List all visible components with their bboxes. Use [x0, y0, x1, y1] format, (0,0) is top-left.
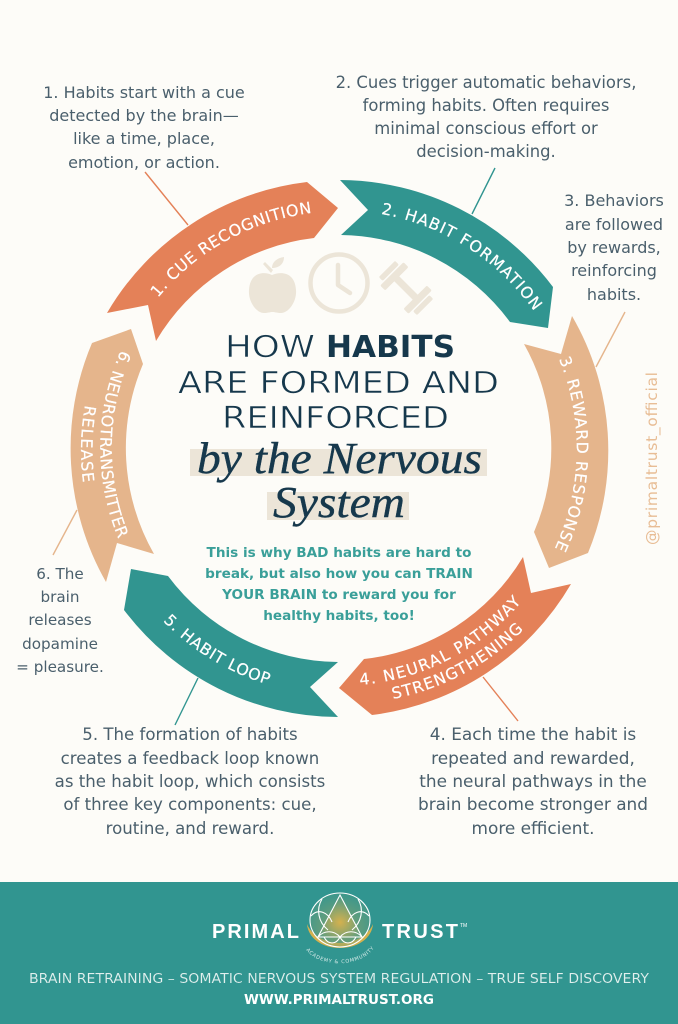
arrow: 1. cue recognition [107, 182, 338, 341]
arrow: 6. neurotransmitter release: RELEASE [80, 406, 96, 482]
logo: primal trust wordmark and emblem [212, 892, 467, 964]
text: step 2 description [336, 73, 636, 161]
connector line: step 4 [483, 677, 518, 721]
connector line: step 3 [596, 312, 625, 367]
text: step 4 description: 4. Each time the habit is [430, 724, 636, 744]
arrow: 4. neural pathway strengthening [339, 557, 571, 715]
arrow: 5. habit loop: 5. HABIT LOOP [164, 614, 270, 683]
arrow: 2. habit formation [340, 180, 553, 328]
website: WWW.PRIMALTRUST.ORG [244, 992, 434, 1008]
title: HOW [225, 330, 315, 365]
icon: dumbbell [375, 257, 437, 319]
arrow: 1. cue recognition: 1. CUE RECOGNITION [150, 202, 310, 297]
footer band [0, 882, 678, 1024]
title: ARE FORMED AND [178, 366, 499, 401]
text: step 1 description: like a time, place, [73, 129, 215, 148]
title: HABITS [326, 330, 455, 365]
vertical handle: @primaltrust_official [643, 372, 662, 545]
title: by the Nervous [197, 434, 482, 483]
tagline: BRAIN RETRAINING – SOMATIC NERVOUS SYSTEM REGULATION – TRUE SELF DISCOVERY [29, 971, 650, 987]
logo: primal trust wordmark and emblem: ACADEMY & COMMUNITY [306, 946, 374, 964]
text: step 4 description [418, 724, 648, 838]
connector line: step 2 [472, 168, 495, 214]
text: step 1 description: emotion, or action. [68, 153, 220, 172]
text: step 3 description: 3. Behaviors [564, 191, 664, 210]
text: step 3 description: habits. [587, 285, 641, 304]
text: step 2 description: decision-making. [416, 142, 556, 161]
connector line: step 6 [53, 510, 77, 555]
text: step 4 description: repeated and rewarded, [431, 748, 635, 768]
logo: primal trust wordmark and emblem: TRUST [382, 921, 458, 943]
title [178, 330, 499, 527]
arrow: 6. neurotransmitter release: 6. NEUROTRANSMITTER [100, 352, 130, 538]
highlight [267, 492, 409, 520]
text: step 3 description: reinforcing [571, 261, 657, 280]
text: step 6 description [16, 565, 104, 676]
text: step 5 description: 5. The formation of habits [82, 725, 298, 744]
arrow: 2. habit formation: 2. HABIT FORMATION [382, 203, 543, 310]
text: step 4 description: more efficient. [472, 818, 594, 838]
text: step 1 description [43, 83, 245, 172]
subtitle text: This is why BAD habits are hard to [207, 545, 471, 561]
arrow: 5. habit loop [124, 569, 338, 717]
text: step 6 description: 6. The [36, 565, 84, 583]
connector line: step 5 [175, 678, 198, 725]
icon: apple [249, 257, 296, 313]
text: step 5 description: of three key components: cue, [63, 795, 317, 814]
text: step 6 description: = pleasure. [16, 658, 104, 676]
logo: primal trust wordmark and emblem: TM [460, 923, 467, 929]
arrow: 6. neurotransmitter release [70, 329, 154, 582]
subtitle text: healthy habits, too! [263, 608, 415, 624]
text: step 3 description: by rewards, [567, 238, 661, 257]
text: step 1 description: detected by the brain— [49, 106, 239, 125]
arrow: 3. reward response [524, 316, 608, 568]
text: step 3 description: are followed [565, 215, 663, 234]
subtitle text: break, but also how you can TRAIN [205, 566, 473, 582]
text: step 5 description: as the habit loop, which consists [55, 772, 325, 791]
text: step 2 description: minimal conscious effort or [374, 119, 598, 138]
text: step 4 description: brain become stronger and [418, 794, 648, 814]
arrow: 4. neural pathway strengthening: STRENGTHENING [392, 622, 522, 698]
title: System [273, 478, 405, 527]
text: step 6 description: brain [40, 588, 80, 606]
arrow: 3. reward response: 3. REWARD RESPONSE [555, 356, 588, 552]
icon: clock [310, 254, 368, 312]
title: REINFORCED [222, 401, 449, 436]
logo: primal trust wordmark and emblem: PRIMAL [212, 921, 299, 943]
text: step 5 description: routine, and reward. [106, 819, 274, 838]
connector line: step 1 [145, 172, 188, 225]
text: step 6 description: dopamine [22, 635, 98, 653]
text: step 4 description: the neural pathways in the [419, 771, 647, 791]
text: step 2 description: 2. Cues trigger automatic behaviors, [336, 73, 636, 92]
subtitle text: YOUR BRAIN to reward you for [221, 587, 456, 603]
highlight [190, 449, 487, 476]
text: step 5 description: creates a feedback loop known [61, 749, 319, 768]
subtitle text [205, 545, 473, 624]
arrow: 4. neural pathway strengthening: 4. NEURAL PATHWAY [360, 594, 519, 684]
text: step 2 description: forming habits. Often requires [363, 96, 609, 115]
text: step 3 description [564, 191, 664, 304]
text: step 5 description [55, 725, 325, 838]
text: step 1 description: 1. Habits start with a cue [43, 83, 245, 102]
text: step 6 description: releases [28, 611, 92, 629]
